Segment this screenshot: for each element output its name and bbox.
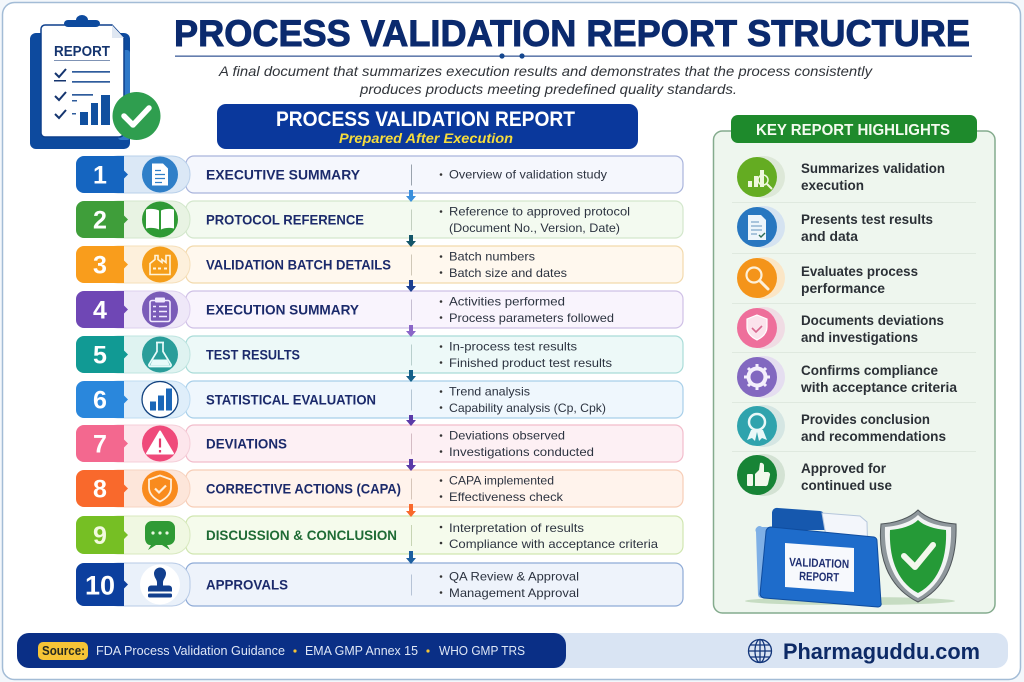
icon: report clipboard: REPORT: [54, 43, 110, 60]
highlight: evaluates process performance: Evaluates process: [801, 264, 918, 279]
row 2: protocol reference: (Document No., Version, Date): [449, 221, 620, 235]
source strip: EMA GMP Annex 15: [305, 644, 418, 658]
highlight: summarizes validation execution: execution: [801, 178, 864, 193]
row 4: execution summary: Activities performed: [449, 294, 565, 308]
highlight: provides conclusion: Provides conclusion: [801, 412, 930, 427]
row 5: test results: In-process test results: [449, 340, 577, 354]
row 1: executive summary: [76, 156, 683, 193]
row 9: discussion and conclusion: DISCUSSION & CONCLUSION: [206, 527, 397, 543]
icon: validation report folder: REPORT: [799, 569, 840, 584]
row 3: validation batch details: VALIDATION BATCH DETAILS: [206, 256, 391, 272]
footer bar: [17, 633, 1008, 668]
row 2: protocol reference: Reference to approved protocol: [449, 204, 630, 218]
row 4: execution summary: EXECUTION SUMMARY: [206, 302, 360, 318]
row 7: deviations: Deviations observed: [449, 428, 565, 442]
row 6: statistical evaluation: [76, 381, 683, 418]
icon: validation report folder: VALIDATION: [789, 555, 849, 571]
source strip: [17, 633, 566, 668]
highlight: summarizes validation execution: [737, 156, 945, 198]
highlight: documents deviations: Documents deviations: [801, 313, 944, 328]
banner: process validation report: Prepared After Execution: [339, 130, 513, 146]
flow arrows between rows: [406, 190, 416, 564]
subtitle: A final document that summarizes execution results and demonstrates that the process consistently: [218, 63, 873, 79]
row 6: statistical evaluation: Trend analysis: [449, 384, 530, 398]
row 1: executive summary: 1: [93, 162, 107, 190]
row 6: statistical evaluation: Capability analysis (Cp, Cpk): [449, 401, 606, 415]
highlight: presents test results: Presents test results: [801, 212, 933, 227]
row 2: protocol reference: [76, 201, 683, 238]
icon: globe: [748, 640, 772, 662]
source strip: FDA Process Validation Guidance: [96, 644, 285, 658]
row 8: corrective actions: CORRECTIVE ACTIONS (CAPA): [206, 480, 401, 496]
row 5: test results: [76, 336, 683, 373]
highlight: approved for continued use: Approved for: [801, 461, 887, 476]
row 8: corrective actions: 8: [93, 476, 107, 504]
row 8: corrective actions: CAPA implemented: [449, 474, 554, 488]
row 7: deviations: Investigations conducted: [449, 445, 594, 459]
row 8: corrective actions: Effectiveness check: [449, 490, 564, 504]
highlight: provides conclusion: and recommendations: [801, 429, 946, 444]
row 10: approvals: Management Approval: [449, 586, 579, 600]
source strip: Source:: [42, 644, 85, 658]
row 5: test results: Finished product test results: [449, 356, 612, 370]
row 4: execution summary: [76, 291, 683, 328]
website: Pharmaguddu.com: [783, 639, 980, 664]
panel heading: [731, 115, 977, 143]
highlight: evaluates process performance: [737, 257, 918, 299]
row 3: validation batch details: 3: [93, 252, 107, 280]
row 1: executive summary: Overview of validation study: [449, 168, 607, 182]
row 2: protocol reference: 2: [93, 206, 107, 234]
highlight: confirms compliance: with acceptance criteria: [800, 380, 957, 395]
icon: green check shield: [880, 510, 956, 602]
row 5: test results: TEST RESULTS: [206, 346, 300, 362]
row 3: validation batch details: Batch size and dates: [449, 266, 567, 280]
row 6: statistical evaluation: STATISTICAL EVALUATION: [206, 392, 376, 408]
highlight: confirms compliance: [737, 356, 957, 398]
row 10: approvals: QA Review & Approval: [449, 570, 579, 584]
highlight: presents test results: [737, 206, 933, 248]
subtitle: [218, 63, 873, 97]
highlight: confirms compliance: Confirms compliance: [801, 363, 938, 378]
banner: process validation report: [217, 104, 638, 149]
row 7: deviations: DEVIATIONS: [206, 436, 287, 452]
highlight: documents deviations: [737, 307, 944, 349]
highlight: documents deviations: and investigations: [801, 330, 918, 345]
row 1: executive summary: EXECUTIVE SUMMARY: [206, 166, 361, 182]
row 4: execution summary: 4: [93, 296, 107, 324]
row 7: deviations: [76, 425, 683, 462]
highlight: summarizes validation execution: Summarizes validation: [801, 161, 945, 176]
row 10: approvals: 10: [85, 570, 115, 600]
icon: validation report folder: [745, 508, 955, 607]
panel heading: KEY REPORT HIGHLIGHTS: [756, 122, 950, 139]
row 6: statistical evaluation: 6: [93, 386, 107, 414]
banner: process validation report: PROCESS VALIDATION REPORT: [276, 108, 575, 131]
source strip: WHO GMP TRS: [439, 644, 525, 658]
highlight: approved for continued use: [737, 454, 892, 496]
row 3: validation batch details: Batch numbers: [449, 250, 535, 264]
row 7: deviations: 7: [93, 430, 107, 458]
panel: key report highlights: [714, 115, 995, 613]
highlight: evaluates process performance: performance: [801, 281, 886, 296]
row 3: validation batch details: [76, 246, 683, 283]
row 9: discussion and conclusion: [76, 516, 683, 554]
icon: report clipboard: [30, 15, 160, 149]
row 5: test results: 5: [93, 342, 107, 370]
highlight: provides conclusion: [737, 405, 946, 447]
subtitle: produces products meeting predefined quality standards.: [359, 81, 737, 97]
row 4: execution summary: Process parameters followed: [449, 311, 614, 325]
title: PROCESS VALIDATION REPORT STRUCTURE: [174, 13, 970, 54]
row 8: corrective actions: [76, 470, 683, 507]
row 10: approvals: APPROVALS: [206, 576, 288, 592]
highlight: presents test results: and data: [801, 229, 858, 244]
row 9: discussion and conclusion: Compliance with acceptance criteria: [449, 537, 658, 551]
row 10: approvals: [76, 563, 683, 606]
highlight: approved for continued use: continued use: [801, 478, 892, 493]
row 2: protocol reference: PROTOCOL REFERENCE: [206, 212, 364, 228]
row 9: discussion and conclusion: Interpretation of results: [449, 521, 584, 535]
row 9: discussion and conclusion: 9: [93, 522, 107, 550]
